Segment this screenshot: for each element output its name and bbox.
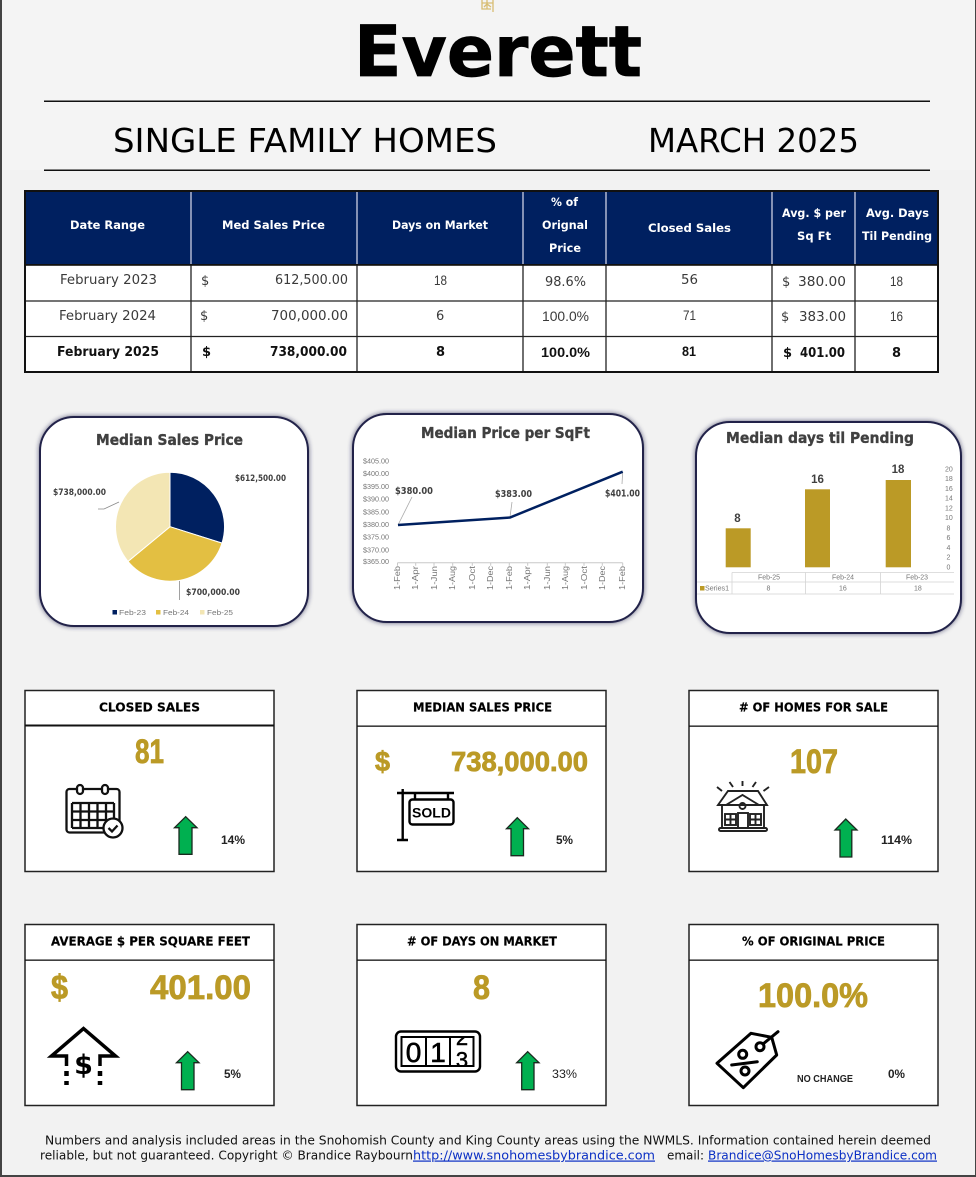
y axis labels: $380.00 [363,522,389,529]
no change label: NO CHANGE [797,1074,853,1085]
table header row: Price [549,241,581,255]
data table under bars: Series1 [705,586,729,592]
pie legend: Feb-25 [207,610,233,617]
panel: median price per sqft line chart [353,414,643,622]
data table under bars [697,572,954,594]
icon: odometer counter: 1 [430,1037,446,1068]
footer disclaimer [40,1134,937,1162]
value: 107 [790,743,838,781]
table row: February 2024: $ [781,310,789,325]
table header row: Closed Sales [648,221,731,235]
table header row: Til Pending [862,229,932,243]
y axis labels: $395.00 [363,484,389,491]
table row: February 2024: 100.0% [542,308,589,324]
change percent: 5% [556,833,573,847]
table row: February 2024: 71 [683,307,696,323]
heading: MEDIAN SALES PRICE [413,700,552,714]
y axis labels: $370.00 [363,548,389,554]
footer disclaimer: email: [667,1148,704,1162]
subtitle: property type: SINGLE FAMILY HOMES [113,121,497,160]
value: 738,000.00 [451,746,588,777]
bar data labels [734,464,905,525]
x axis labels: 1-Feb [505,565,514,590]
panel: percent of original price [689,924,938,1106]
x axis labels: 1-Jun [543,566,552,590]
table row: February 2025: 8 [892,346,901,361]
x axis labels: 1-Dec [486,566,495,590]
bar data labels: 16 [811,474,824,486]
line data labels: $383.00 [495,489,532,500]
value: 100.0% [758,977,868,1015]
value: $ [51,969,68,1007]
table row: February 2023: 612,500.00 [275,273,348,288]
panel: number of days on market [357,924,606,1106]
footer disclaimer: Numbers and analysis included areas in the Snohomish County and King County areas using the NWMLS. Information contained herein deemed [45,1134,931,1148]
chart title: Median Price per SqFt [421,424,590,442]
pie chart [116,472,225,581]
pie legend [112,610,233,617]
table row: February 2024: 383.00 [799,310,846,325]
table header row: Avg. Days [866,206,929,220]
line data labels [395,486,640,500]
icon: odometer counter: 2 [456,1025,468,1050]
price line [398,472,623,525]
icon: sold sign [397,789,454,840]
y axis labels: 0 [946,564,950,572]
pie legend: Feb-24 [163,610,189,617]
heading: AVERAGE $ PER SQUARE FEET [51,934,251,948]
value: 8 [473,969,490,1007]
pie data labels: $700,000.00 [186,588,240,598]
heading: # OF HOMES FOR SALE [739,700,888,714]
data table under bars: 18 [914,586,922,592]
icon: calendar with check [66,785,122,838]
panel: number of homes for sale [689,690,938,872]
table row: February 2023: February 2023 [60,273,157,288]
table header row: Avg. $ per [782,206,846,220]
y axis labels: 14 [945,496,953,502]
icon: percent price tag [717,1032,778,1088]
footer disclaimer: http://www.snohomesbybrandice.com [413,1148,655,1162]
arrow: up [517,1052,539,1090]
chart title: Median days til Pending [726,429,914,447]
panel: average price per square feet [25,924,274,1106]
panel: closed sales [25,690,274,872]
x axis labels: 1-Aug [448,566,457,590]
arrow: up [506,818,528,856]
table header row: % of [551,195,579,209]
value: 81 [135,733,164,771]
change percent: 14% [221,833,245,847]
table row: February 2023: 56 [681,273,698,288]
x axis labels: 1-Oct [580,565,589,590]
pie data labels [53,474,286,600]
y axis labels: 18 [945,476,953,483]
bar data labels: 8 [734,513,741,525]
y axis labels [945,466,953,572]
icon: small gold logo [482,0,493,12]
table row: February 2025: 81 [682,343,696,359]
table row: February 2023: 18 [890,273,903,289]
arrow: up [835,819,857,857]
x axis labels [393,565,627,590]
data table under bars: 16 [839,586,847,592]
table row: February 2025: 401.00 [800,346,845,361]
x axis labels: 1-Oct [468,565,477,590]
x axis labels: 1-Dec [598,566,607,590]
change percent: 5% [224,1067,241,1081]
line data labels: $380.00 [395,486,433,497]
y axis labels: 8 [946,526,950,532]
y axis labels: 4 [946,545,950,552]
table row: February 2025: $ [202,345,211,360]
x axis labels: 1-Feb [393,565,402,590]
icon: sold sign: SOLD [412,804,451,820]
icon: house [717,781,769,831]
table row: February 2025: 738,000.00 [270,345,347,360]
bar data labels: 18 [892,464,905,476]
y axis labels: 12 [945,506,953,512]
y axis labels: $385.00 [363,510,389,516]
table row: February 2023 [60,272,903,290]
y axis labels: 2 [946,554,950,562]
y axis labels: 16 [945,486,953,493]
pie legend: Feb-23 [119,610,146,617]
value: 401.00 [150,969,251,1007]
y axis labels: $390.00 [363,496,389,504]
y axis labels: 6 [946,535,950,542]
y axis labels: 10 [945,515,953,522]
table header row [70,195,932,255]
data table under bars: Feb-23 [906,574,928,582]
icon: odometer counter: 3 [456,1048,468,1072]
table header row: Sq Ft [797,229,832,243]
y axis labels: $400.00 [363,471,389,478]
change percent: 114% [881,833,912,847]
x axis labels: 1-Apr [411,566,420,590]
chart title: Median Sales Price [96,431,243,449]
pie data labels: $612,500.00 [235,474,286,484]
data table under bars: 8 [766,586,770,592]
table row: February 2024 [59,307,903,325]
icon: odometer counter: 0 [406,1037,421,1068]
x axis labels: 1-Jun [430,566,439,590]
y axis labels: $365.00 [363,559,389,566]
data table under bars: Feb-25 [758,574,780,582]
x axis labels: 1-Feb [618,565,627,590]
arrow: up [176,1052,199,1090]
heading: % OF ORIGINAL PRICE [742,934,885,948]
value: $ [375,746,390,777]
table row: February 2025: February 2025 [57,345,159,360]
table row: February 2024: $ [200,309,208,324]
heading: # OF DAYS ON MARKET [407,934,558,948]
table header row: Orignal [542,218,588,232]
x axis labels: 1-Aug [561,566,570,590]
panel: median sales price [357,690,606,872]
table: market statistics by year [25,191,938,372]
table row: February 2023: 98.6% [545,275,586,290]
y axis labels: $405.00 [363,458,389,466]
table row: February 2023: 380.00 [798,275,846,290]
x axis labels: 1-Apr [523,566,532,590]
table row: February 2023: $ [782,275,790,290]
data table under bars: Feb-24 [832,574,854,582]
pie data labels: $738,000.00 [53,488,106,498]
heading: CLOSED SALES [99,700,200,714]
table row: February 2024: 700,000.00 [271,309,348,324]
panel: median days til pending bar chart [696,422,961,633]
bars [726,480,911,567]
icon: house with dollar sign: $ [74,1050,93,1081]
table row: February 2023: 18 [434,272,447,288]
value [51,969,251,1007]
line data labels: $401.00 [605,488,640,500]
icon: odometer counter [396,1025,480,1072]
y axis labels: 20 [945,466,953,474]
change percent: 0% [888,1067,905,1081]
table row: February 2023: $ [201,274,209,289]
y axis labels: $375.00 [363,534,389,542]
table row: February 2025 [57,343,901,361]
table header row: Date Range [70,218,145,232]
footer disclaimer: reliable, but not guaranteed. Copyright © Brandice Raybourn [40,1148,413,1162]
title: Everett [354,11,642,93]
table row: February 2025: 8 [436,345,445,360]
table row: February 2024: 6 [436,309,444,324]
icon: house with dollar sign [52,1028,116,1085]
table row: February 2025: $ [783,346,792,361]
footer disclaimer: Brandice@SnoHomesbyBrandice.com [708,1148,937,1162]
table row: February 2025: 100.0% [541,344,591,360]
y axis labels [363,458,389,566]
change percent: 33% [552,1067,577,1081]
subtitle: month: MARCH 2025 [648,121,859,160]
table row: February 2024: 16 [890,308,903,324]
table header row: Days on Market [392,218,488,232]
arrow: up [174,817,197,854]
table row: February 2024: February 2024 [59,309,156,324]
table header row: Med Sales Price [222,218,325,232]
value [375,746,588,777]
panel: median sales price pie chart [40,417,308,626]
